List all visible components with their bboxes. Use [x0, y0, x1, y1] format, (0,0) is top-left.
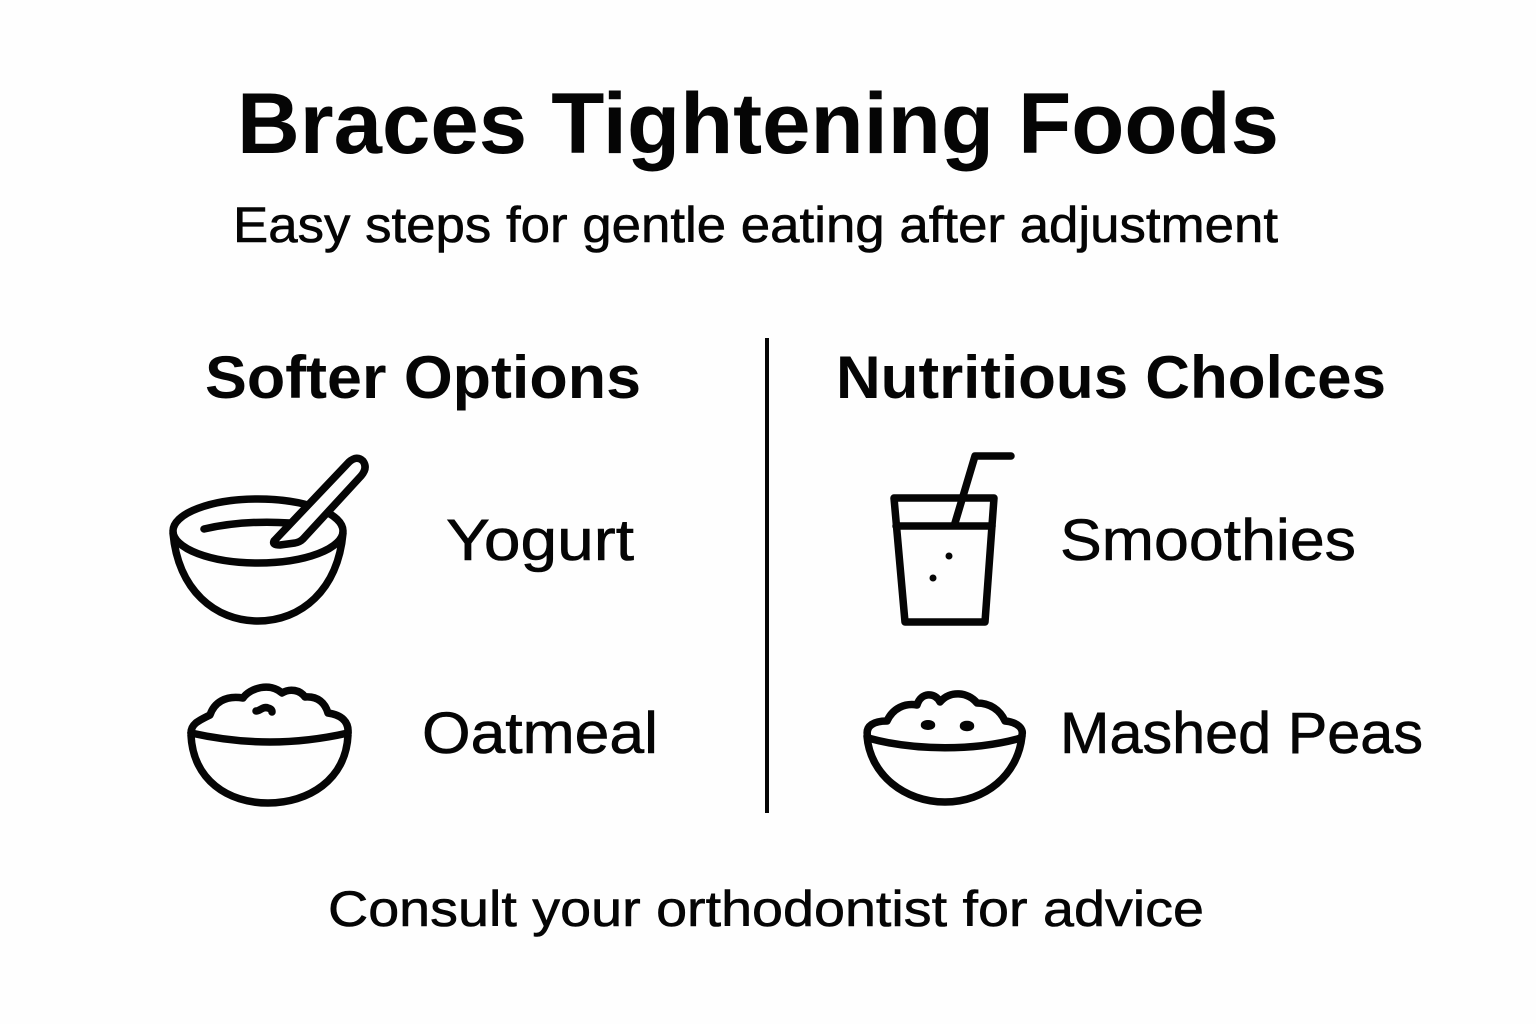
- heading: softer options: Softer Options: [205, 344, 641, 411]
- panel: softer options: [173, 344, 658, 803]
- subtitle: Easy steps for gentle eating after adjustment: [233, 197, 1278, 253]
- icon: smoothie glass with straw: [894, 456, 1011, 622]
- title: Braces Tightening Foods: [237, 76, 1279, 172]
- icon: yogurt bowl with spoon: [173, 458, 365, 621]
- icon: oatmeal bowl: [191, 687, 348, 803]
- label: oatmeal: Oatmeal: [422, 701, 658, 766]
- label: mashed peas: Mashed Peas: [1060, 701, 1423, 766]
- label: smoothies: Smoothies: [1060, 508, 1356, 573]
- panel: nutritious choices: [836, 344, 1423, 802]
- label: yogurt: Yogurt: [446, 508, 634, 573]
- footer note: Consult your orthodontist for advice: [328, 881, 1204, 937]
- divider: [765, 338, 769, 813]
- icon: mashed peas bowl: [867, 694, 1022, 802]
- heading: nutritious choices: Nutritious Cholces: [836, 344, 1386, 411]
